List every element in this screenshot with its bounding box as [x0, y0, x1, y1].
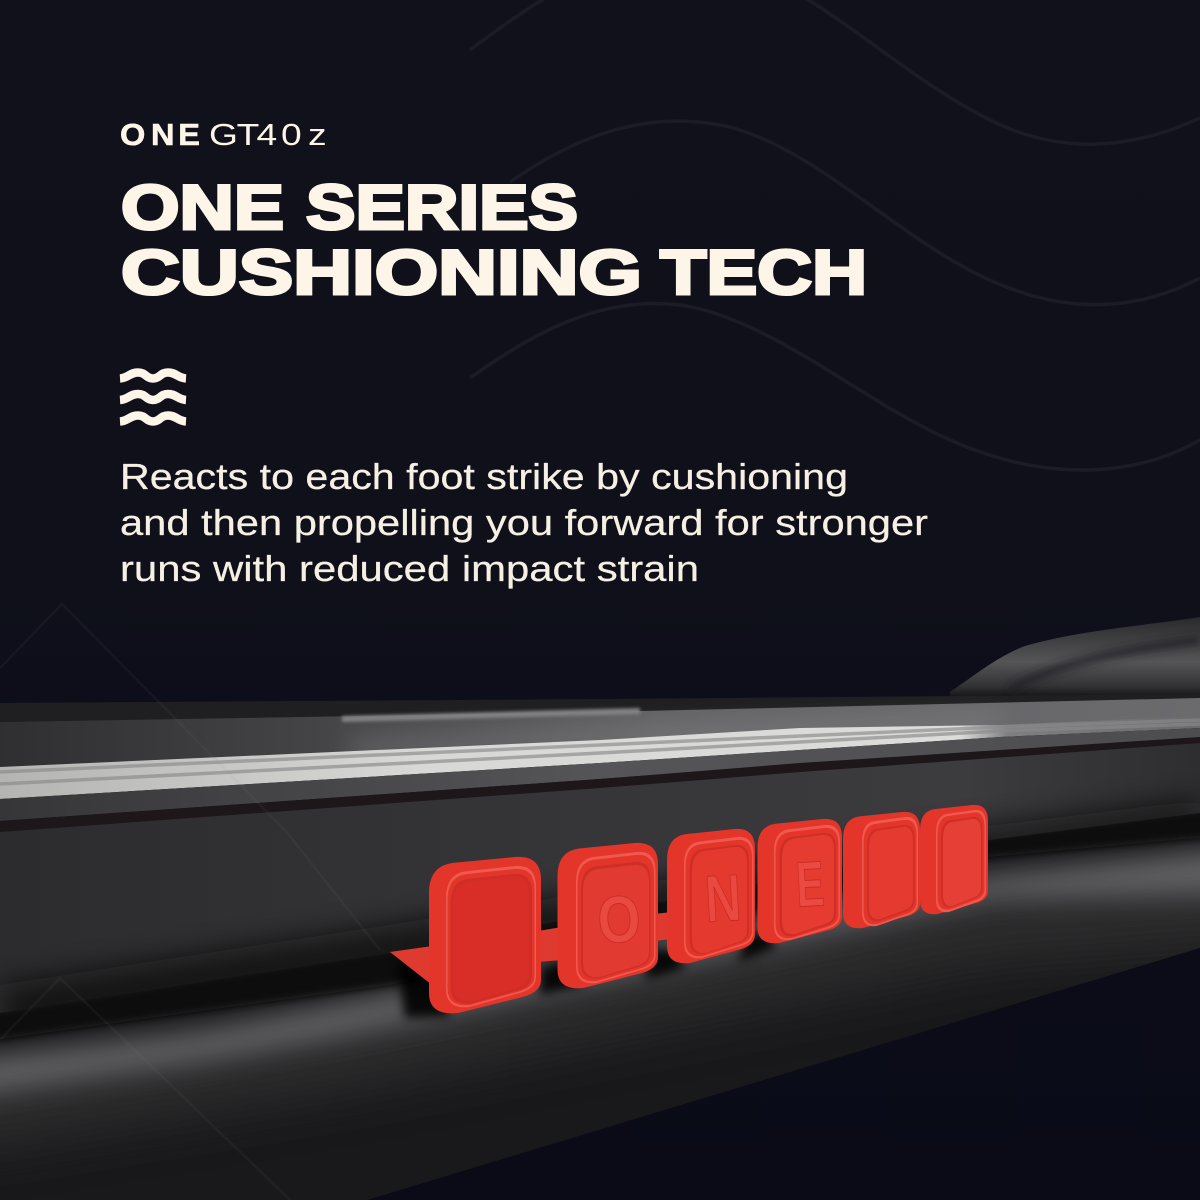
treadmill deck [0, 694, 1200, 832]
deck top edge [0, 694, 1200, 722]
letter N: N [703, 860, 743, 936]
white reflective strip [0, 716, 1200, 799]
description text: Reacts to each foot strike by cushioning [120, 456, 848, 497]
treadmill console hump [950, 617, 1200, 698]
dark groove [0, 737, 1200, 832]
title: SERIES [306, 173, 578, 243]
title: CUSHIONING [121, 238, 642, 308]
tube shadow under panel [0, 808, 1200, 1042]
button 3 [667, 829, 755, 963]
button 6 [920, 805, 988, 914]
background wave lines [470, 0, 1200, 470]
button 2 [558, 843, 658, 988]
deck glow above strip [350, 716, 1000, 756]
icon: cushioning waves [120, 372, 186, 422]
button 5 [843, 812, 920, 928]
title: TECH [660, 238, 867, 308]
deck surface [0, 698, 1200, 769]
connector tabs [390, 912, 672, 985]
tube broad sheen [0, 892, 1200, 1148]
title [121, 173, 867, 308]
description text [120, 456, 928, 589]
title: ONE [121, 173, 284, 243]
letter E: E [794, 847, 826, 921]
button 4 [758, 819, 842, 943]
eyebrow: product name: GT40z [209, 118, 327, 152]
button 1 [429, 857, 541, 1013]
blurred deck logo [342, 708, 640, 722]
letter O: O [596, 881, 642, 957]
description text: runs with reduced impact strain [120, 548, 699, 589]
eyebrow: product name [120, 117, 327, 152]
treadmill side panel [0, 740, 1200, 1035]
red ONE badge [429, 805, 988, 1013]
faint triangle lines over photo [0, 604, 380, 1200]
button shadows [398, 932, 775, 1018]
deck lip [0, 728, 1200, 821]
tube highlight [0, 846, 1200, 1100]
treadmill lower tube [0, 800, 1200, 1200]
description text: and then propelling you forward for stronger [120, 502, 928, 543]
eyebrow: product name: ONE [120, 117, 200, 152]
